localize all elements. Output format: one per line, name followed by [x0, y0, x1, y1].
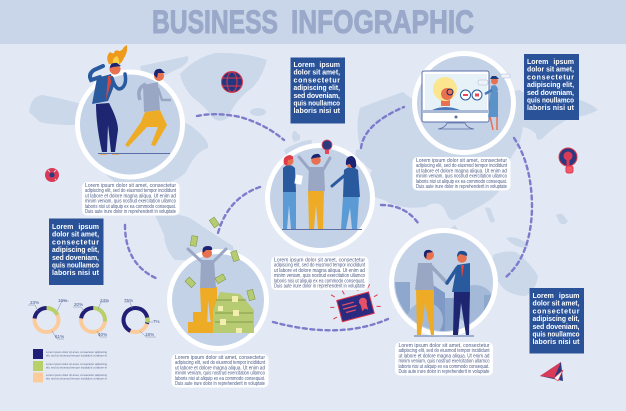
- call buttons: [460, 90, 482, 100]
- donut chart 2: 24%: [100, 298, 109, 303]
- note: video call: minim veniam, quis nostrud exercitation ullamco: [416, 174, 507, 180]
- text block: top right: dolor sit amet,: [527, 67, 574, 74]
- donut chart 3: 18%: [145, 332, 154, 337]
- donut chart 2: [73, 298, 109, 337]
- circle: money: [170, 217, 266, 348]
- icon: small light bulb: [322, 140, 332, 154]
- note: meeting: Duis aute irure dolor in reprehenderit in voluptate: [274, 284, 365, 290]
- text block: top centre: consectetur: [294, 77, 340, 84]
- ground line: [98, 152, 170, 154]
- icon: gear: [45, 168, 59, 182]
- note: handshake: Lorem ipsum dolor sit amet, consectetur: [398, 343, 490, 349]
- note: stress: adipiscing elit, sed do eiusmod tempor incididunt: [85, 188, 177, 194]
- legend: [33, 349, 107, 382]
- note: money: [172, 354, 268, 388]
- text block: top right: ipsum: [553, 59, 574, 66]
- bearded man: [332, 156, 360, 229]
- note: video call: [412, 157, 510, 190]
- note: meeting: Lorem ipsum dolor sit amet, consectetur: [274, 258, 365, 264]
- woman with paper: [283, 155, 303, 229]
- text block: left: [49, 218, 104, 285]
- text block: top centre: Lorem: [294, 62, 315, 69]
- donut chart 2: 40%: [98, 332, 107, 337]
- text block: top right: sed doveniam,: [527, 90, 574, 97]
- note: handshake: Duis aute irure dolor in reprehenderit in voluptate: [398, 369, 490, 375]
- world map background: [29, 53, 598, 296]
- note: money: Duis aute irure dolor in reprehenderit in voluptate: [175, 381, 265, 387]
- text block: bottom right: quis noullamco: [532, 332, 580, 338]
- ground line: [414, 335, 474, 337]
- legend: elit, sed do eiusmod tempor incididunt ut labore et: [46, 376, 107, 380]
- text block: top right: Lorem: [527, 59, 548, 66]
- money pile: [213, 292, 254, 333]
- note: stress: [82, 182, 180, 216]
- note: handshake: ut labore et dolore magna aliqua. Ut enim ad: [398, 353, 490, 359]
- running colleague: [125, 69, 171, 147]
- note: stress: Lorem ipsum dolor sit amet, consectetur: [85, 183, 176, 189]
- legend: Lorem ipsum dolor sit amet, consectetur adipiscing: [46, 362, 107, 366]
- note: money: adipiscing elit, sed do eiusmod tempor incididunt: [175, 360, 266, 366]
- donut chart 3: 7%: [153, 319, 160, 324]
- text block: left: dolor sit amet,: [52, 232, 99, 239]
- text block: bottom right: ipsum: [559, 293, 580, 300]
- icon: light bulb: [559, 148, 577, 173]
- presenter woman: [478, 74, 510, 130]
- text block: top centre: laboris nisi ut: [294, 108, 341, 115]
- donut chart 1: 16%: [58, 298, 67, 303]
- text block: bottom right: dolor sit amet,: [532, 301, 580, 308]
- icon: paper plane: [540, 362, 563, 381]
- note: video call: Duis aute irure dolor in reprehenderit in voluptate: [416, 184, 507, 190]
- note: video call: adipiscing elit, sed do eiusmod tempor incididunt: [416, 163, 508, 169]
- donut chart 2: 20%: [74, 302, 83, 307]
- text block: left: ipsum: [78, 224, 99, 231]
- note: handshake: laboris nisi ut aliquip ex ea commodo consequat.: [398, 364, 490, 370]
- circle: stress and running: [78, 45, 182, 177]
- note: video call: ut labore et dolore magna aliqua. Ut enim ad: [416, 168, 507, 174]
- note: handshake: [395, 342, 493, 376]
- man in grey jacket: [415, 250, 447, 335]
- legend: Lorem ipsum dolor sit amet, consectetur adipiscing: [46, 350, 107, 354]
- note: video call: Lorem ipsum dolor sit amet, consectetur: [416, 158, 507, 164]
- header band: [0, 0, 626, 44]
- text block: left: consectetur: [52, 239, 99, 246]
- video caller: [432, 77, 460, 110]
- circle: video call: [414, 54, 514, 152]
- legend: elit, sed do eiusmod tempor incididunt ut labore et: [46, 354, 107, 358]
- flying notes: [185, 217, 255, 301]
- note: money: ut labore et dolore magna aliqua. Ut enim ad: [175, 365, 265, 371]
- man with raised arm: [299, 154, 330, 229]
- donut chart 1: 23%: [30, 300, 39, 305]
- note: meeting: [271, 256, 368, 290]
- man in navy suit: [447, 251, 470, 335]
- coins: [188, 312, 217, 333]
- note: meeting: ut labore et dolore magna aliqua. Ut enim ad: [274, 268, 365, 274]
- text block: left: quis noullamco: [52, 262, 99, 270]
- text block: bottom right: laboris nisi ut: [532, 339, 580, 346]
- donut chart 3: [120, 298, 160, 337]
- text block: top centre: dolor sit amet,: [294, 70, 340, 77]
- note: stress: minim veniam, quis nostrud exercitation ullamco: [85, 199, 176, 205]
- note: meeting: minim veniam, quis nostrud exercitation ullamco: [274, 273, 365, 279]
- monitor: [422, 71, 489, 129]
- ground line: [282, 228, 362, 230]
- city skyline: [395, 282, 492, 331]
- circle: handshake: [392, 230, 496, 338]
- dashed connectors: [125, 107, 532, 330]
- text block: left: adipiscing elit,: [52, 247, 99, 254]
- note: stress: ut labore et dolore magna aliqua. Ut enim ad: [85, 193, 176, 199]
- text block: top centre: sed doveniam,: [294, 93, 340, 100]
- rich man: [188, 246, 226, 333]
- title: [152, 4, 474, 40]
- icon: certificate: [327, 282, 382, 324]
- note: handshake: minim veniam, quis nostrud exercitation ullamco: [398, 359, 490, 365]
- note: handshake: adipiscing elit, sed do eiusmod tempor incididunt: [398, 348, 490, 354]
- text block: bottom right: Lorem: [532, 293, 554, 300]
- note: stress: Duis aute irure dolor in reprehenderit in voluptate: [85, 209, 176, 215]
- text block: left: sed doveniam,: [52, 255, 99, 262]
- donut chart 3: 75%: [124, 298, 133, 303]
- text block: top right: quis noullamco: [527, 98, 574, 104]
- note: meeting: adipiscing elit, sed do eiusmod tempor incididunt: [274, 263, 366, 269]
- text block: bottom right: [530, 288, 584, 354]
- note: stress: laboris nisi ut aliquip ex ea commodo consequat.: [85, 204, 176, 210]
- text block: left: laboris nisi ut: [52, 270, 100, 277]
- text block: top centre: [290, 58, 345, 124]
- text block: bottom right: consectetur: [532, 308, 580, 315]
- icon: globe: [222, 72, 242, 92]
- donut chart 1: 61%: [55, 334, 64, 339]
- donut chart 1: [28, 298, 69, 339]
- title: INFOGRAPHIC: [291, 4, 474, 40]
- text block: left: Lorem: [52, 224, 73, 231]
- note: video call: laboris nisi ut aliquip ex ea commodo consequat.: [416, 179, 507, 185]
- note: money: minim veniam, quis nostrud exercitation ullamco: [175, 371, 265, 377]
- text block: top right: laboris nisi ut: [527, 105, 575, 112]
- text block: bottom right: sed doveniam,: [532, 324, 580, 331]
- text block: top right: adipiscing elit,: [527, 82, 574, 89]
- burning businessman: [90, 63, 126, 154]
- circle: team meeting: [268, 146, 372, 250]
- text block: bottom right: adipiscing elit,: [532, 316, 580, 323]
- note: meeting: laboris nisi ut aliquip ex ea commodo consequat.: [274, 278, 365, 284]
- title: BUSINESS: [152, 4, 278, 40]
- legend: elit, sed do eiusmod tempor incididunt ut labore et: [46, 366, 107, 370]
- text block: top right: consectetur: [527, 74, 574, 81]
- text block: top centre: adipiscing elit,: [294, 85, 340, 92]
- text block: top centre: quis noullamco: [294, 100, 340, 108]
- legend: Lorem ipsum dolor sit amet, consectetur adipiscing: [46, 373, 107, 377]
- text block: top right: [524, 54, 579, 120]
- text block: top centre: ipsum: [319, 62, 340, 69]
- note: money: laboris nisi ut aliquip ex ea commodo consequat.: [175, 376, 265, 382]
- flame: [107, 45, 127, 65]
- note: money: Lorem ipsum dolor sit amet, consectetur: [175, 355, 265, 361]
